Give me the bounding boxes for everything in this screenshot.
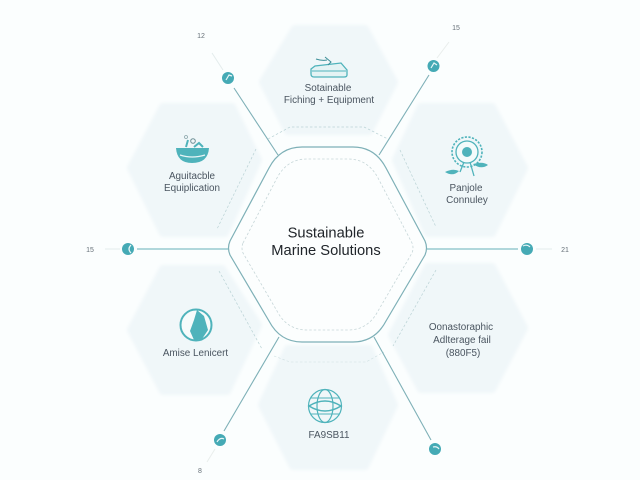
icon: globe map <box>180 310 212 340</box>
label: Oonastoraphic <box>429 322 493 333</box>
value: 21 <box>561 247 569 254</box>
petal: oceanographic: Adlterage fail <box>433 335 491 346</box>
connector: upper right <box>379 25 460 155</box>
title: Sustainable <box>288 226 364 242</box>
value: 12 <box>197 33 205 40</box>
label: Amise Lenicert <box>163 348 228 359</box>
petal: panjole connuley: Connuley <box>446 195 488 206</box>
petal: aquatic education <box>131 107 258 233</box>
central hexagon <box>228 147 426 342</box>
petal: bottom <box>262 349 394 466</box>
label: FA9SB11 <box>308 430 350 441</box>
petal: panjole connuley <box>396 107 524 233</box>
petal: amise lenicert <box>131 269 262 391</box>
central hexagon: Marine Solutions <box>271 243 381 259</box>
petal: oceanographic <box>392 267 524 389</box>
connector: left <box>86 243 229 255</box>
connector: right <box>427 243 569 255</box>
icon: globe <box>308 390 342 422</box>
value: 15 <box>452 25 460 32</box>
connector: upper left <box>197 33 278 155</box>
icon: bowl <box>176 136 209 163</box>
label: Aguitacble <box>169 171 216 182</box>
icon: boat <box>311 57 347 77</box>
icon: sun flower <box>445 137 488 176</box>
value: 8 <box>198 468 202 475</box>
label: Sotainable <box>305 83 352 94</box>
petal: sustainable fishing equipment: Fiching + Equipment <box>284 95 374 106</box>
value: 15 <box>86 247 94 254</box>
label: Panjole <box>450 183 483 194</box>
petal: oceanographic: (880F5) <box>446 348 480 359</box>
petal: sustainable fishing equipment <box>263 29 394 139</box>
petal: aquatic education: Equiplication <box>164 183 220 194</box>
connector: lower right <box>374 337 441 455</box>
connector: lower left <box>198 337 279 475</box>
